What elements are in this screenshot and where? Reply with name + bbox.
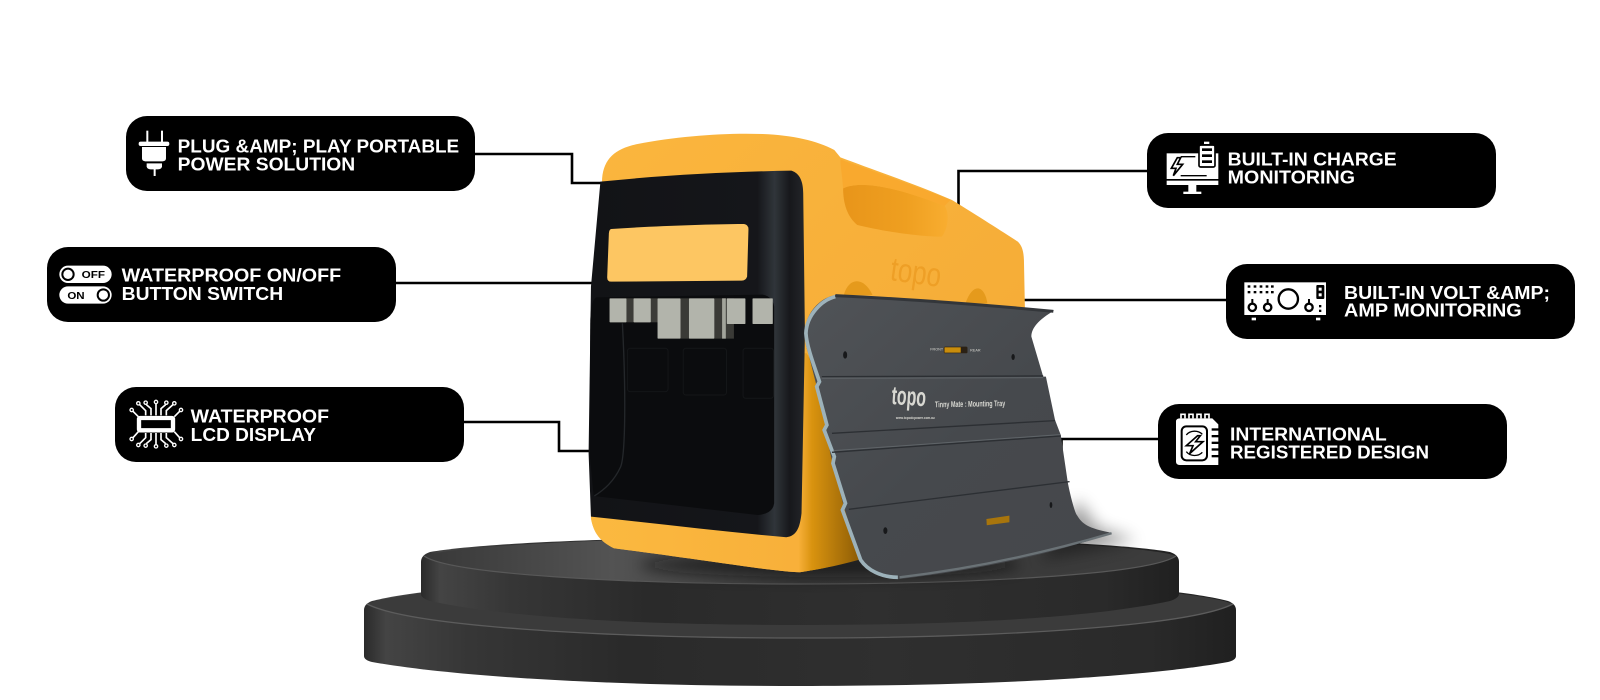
callout: plug and play: POWER SOLUTION xyxy=(178,154,355,175)
callout: registered design: INTERNATIONAL xyxy=(1230,424,1387,445)
pedestal xyxy=(364,537,1236,686)
callout: volt and amp monitoring: AMP MONITORING xyxy=(1344,300,1522,321)
carry handle xyxy=(843,185,948,237)
callout: on/off switch: WATERPROOF ON/OFF xyxy=(122,265,341,286)
upper disc xyxy=(421,537,1179,625)
tray labels: Tinny Mate : Mounting Tray xyxy=(935,398,1006,409)
icon: toggle switches: OFF xyxy=(82,270,105,281)
callout: LCD display: LCD DISPLAY xyxy=(191,424,317,445)
callout: charge monitoring: MONITORING xyxy=(1228,166,1355,187)
callout: registered design: REGISTERED DESIGN xyxy=(1230,442,1429,463)
icon: toggle switches: ON xyxy=(67,291,85,302)
embossed logo: topo xyxy=(888,251,944,295)
tray lower slot xyxy=(986,516,1009,525)
icon: monitor with battery xyxy=(1167,142,1218,194)
callout: on/off switch xyxy=(47,247,396,322)
lower disc xyxy=(364,576,1236,686)
tray labels: FRONT xyxy=(930,348,944,352)
faint moulded labels xyxy=(627,348,773,398)
icon: LCD chip xyxy=(130,400,183,448)
tray labels: www.topodcpower.com.au xyxy=(895,415,935,420)
tray shadow xyxy=(1040,500,1136,560)
callout: plug and play xyxy=(126,116,475,191)
tray labels: topo xyxy=(891,380,927,412)
icon: amplifier meter xyxy=(1244,282,1326,320)
tray labels xyxy=(891,348,1006,420)
callout: volt and amp monitoring xyxy=(1226,264,1575,339)
tray slot xyxy=(944,347,967,353)
callout: charge monitoring: BUILT-IN CHARGE xyxy=(1228,149,1397,170)
callout: registered design xyxy=(1158,404,1507,479)
callout: charge monitoring xyxy=(1147,133,1496,208)
tray labels: REAR xyxy=(970,348,981,352)
callout: on/off switch: BUTTON SWITCH xyxy=(122,283,283,304)
icon: chip with lightning bolt xyxy=(1176,414,1220,465)
product: yellow battery box with mounting tray xyxy=(589,134,1112,579)
yellow body xyxy=(591,134,1025,572)
callout: LCD display xyxy=(115,387,464,462)
icon: toggle switches xyxy=(59,266,112,304)
recess xyxy=(590,295,774,515)
mounting tray xyxy=(805,295,1112,579)
callout: plug and play: PLUG &AMP; PLAY PORTABLE xyxy=(178,136,459,157)
black front panel xyxy=(589,171,805,537)
contact shadow xyxy=(640,553,1020,577)
callout: volt and amp monitoring: BUILT-IN VOLT &AMP; xyxy=(1344,282,1550,303)
connectors xyxy=(610,298,773,339)
callout: LCD display: WATERPROOF xyxy=(191,406,329,427)
leader lines xyxy=(396,154,1226,456)
display window xyxy=(607,224,748,282)
tray holes xyxy=(843,351,1052,534)
icon: plug xyxy=(139,131,169,176)
